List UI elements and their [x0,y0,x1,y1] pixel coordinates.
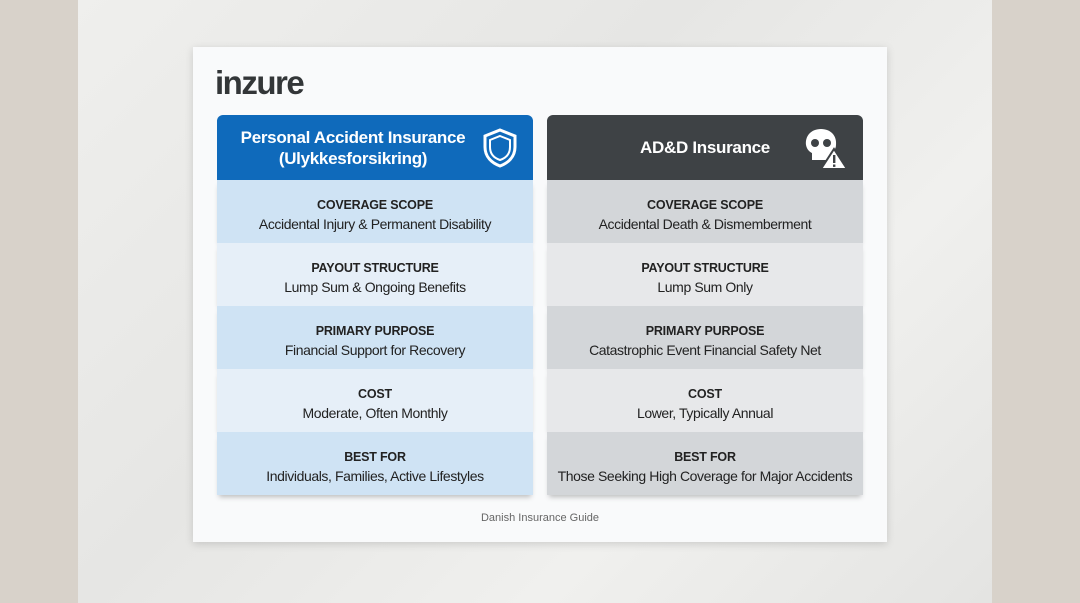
footer: Danish Insurance Guide [481,512,599,524]
header: AD&D: AD&D Insurance [640,138,770,157]
panel: personal accident: COVERAGE SCOPE [317,198,433,212]
panel: personal accident: Financial Support for Recovery [285,342,465,358]
panel: AD&D: PAYOUT STRUCTURE [641,261,769,275]
panel: personal accident: BEST FOR [344,450,406,464]
panel: personal accident: Lump Sum & Ongoing Benefits [284,279,466,295]
header: AD&D [547,115,863,180]
panel: personal accident: COST [358,387,392,401]
panel: AD&D: COST [688,387,722,401]
header: personal accident: (Ulykkesforsikring) [279,148,427,168]
header: personal accident [217,115,533,180]
card [193,47,887,542]
panel: AD&D: Those Seeking High Coverage for Major Accidents [558,468,852,484]
panel: personal accident: PAYOUT STRUCTURE [311,261,439,275]
panel: personal accident: PRIMARY PURPOSE [316,324,434,338]
panel: AD&D: Accidental Death & Dismemberment [599,216,811,232]
icon: skull warning [806,129,846,168]
panel: AD&D: PRIMARY PURPOSE [646,324,764,338]
logo: inzure [215,64,303,101]
panel: personal accident: Individuals, Families, Active Lifestyles [266,468,484,484]
header: personal accident: Personal Accident Insurance [241,128,465,146]
panel: AD&D: COVERAGE SCOPE [647,198,763,212]
panel: personal accident: Accidental Injury & Permanent Disability [259,216,491,232]
panel: AD&D: Lower, Typically Annual [637,405,773,421]
panel: personal accident: Moderate, Often Monthly [303,405,447,421]
icon: shield [484,128,516,168]
panel: AD&D [546,115,864,500]
panel: AD&D: BEST FOR [674,450,736,464]
panel: AD&D: Lump Sum Only [657,279,753,295]
panel: personal accident [216,115,534,500]
panel: AD&D: Catastrophic Event Financial Safety Net [589,342,821,358]
